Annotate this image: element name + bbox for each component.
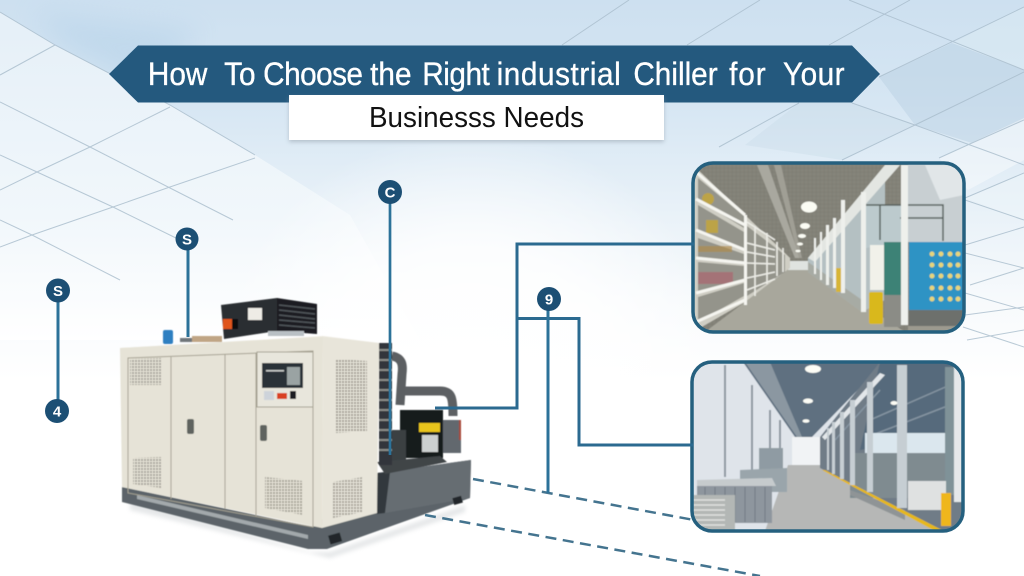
ceiling beams [757, 165, 800, 258]
lights [802, 365, 898, 423]
subtitle box: Businesss Needs [369, 102, 584, 134]
title banner: Right [422, 56, 490, 92]
glass columns [822, 373, 885, 440]
title banner: for [729, 56, 767, 92]
control panel [257, 352, 313, 407]
compressor and coil [400, 410, 443, 458]
cabinet side [322, 337, 379, 528]
perforated vents [130, 358, 162, 385]
marker S and 4: 4 [53, 404, 62, 420]
marker 9: 9 [545, 292, 553, 308]
left wall panel seams [725, 365, 780, 477]
lights [796, 202, 817, 252]
title banner: Chiller [633, 56, 718, 92]
brass fitting [180, 338, 192, 342]
title banner [109, 46, 880, 102]
marker C: C [385, 184, 396, 202]
floor [705, 268, 905, 332]
ceiling [743, 362, 885, 437]
connector lines [435, 244, 694, 445]
cabinet front [120, 337, 323, 528]
subtitle box [289, 95, 664, 142]
dashed guide lines [425, 479, 760, 576]
cabinet top [120, 336, 379, 358]
top mounted unit [221, 298, 277, 339]
photo: warehouse aisle with shelves [693, 163, 964, 332]
marker 9 [537, 287, 561, 493]
marker S and 4 [45, 278, 70, 423]
marker S: S [182, 232, 192, 248]
back wall [792, 437, 820, 467]
ground shadow [130, 500, 465, 558]
right side bay [820, 362, 963, 531]
blue canister [163, 330, 173, 344]
title banner: industrial [497, 56, 621, 92]
marker C [378, 180, 402, 455]
industrial chiller unit [120, 298, 471, 558]
left shelving [693, 165, 790, 332]
cooling units [759, 448, 783, 470]
photo: corridor with cooling units [692, 362, 963, 531]
marker S and 4: S [53, 283, 63, 300]
floor [765, 465, 940, 531]
yellow barrel [869, 292, 883, 324]
title banner: Your [783, 56, 845, 92]
door seams [128, 351, 313, 527]
door handles [187, 419, 194, 434]
back of aisle [788, 261, 808, 270]
white unit [908, 481, 946, 510]
title banner: How [148, 56, 208, 92]
title banner: To [224, 56, 256, 92]
marker S [176, 228, 198, 337]
right window wall [808, 172, 885, 312]
blue cabinet [909, 242, 964, 310]
steel base [122, 460, 471, 549]
title banner: the [370, 56, 412, 92]
yellow post [941, 493, 951, 526]
title banner: Choose [263, 56, 362, 92]
yellow floor stripe [822, 470, 942, 531]
